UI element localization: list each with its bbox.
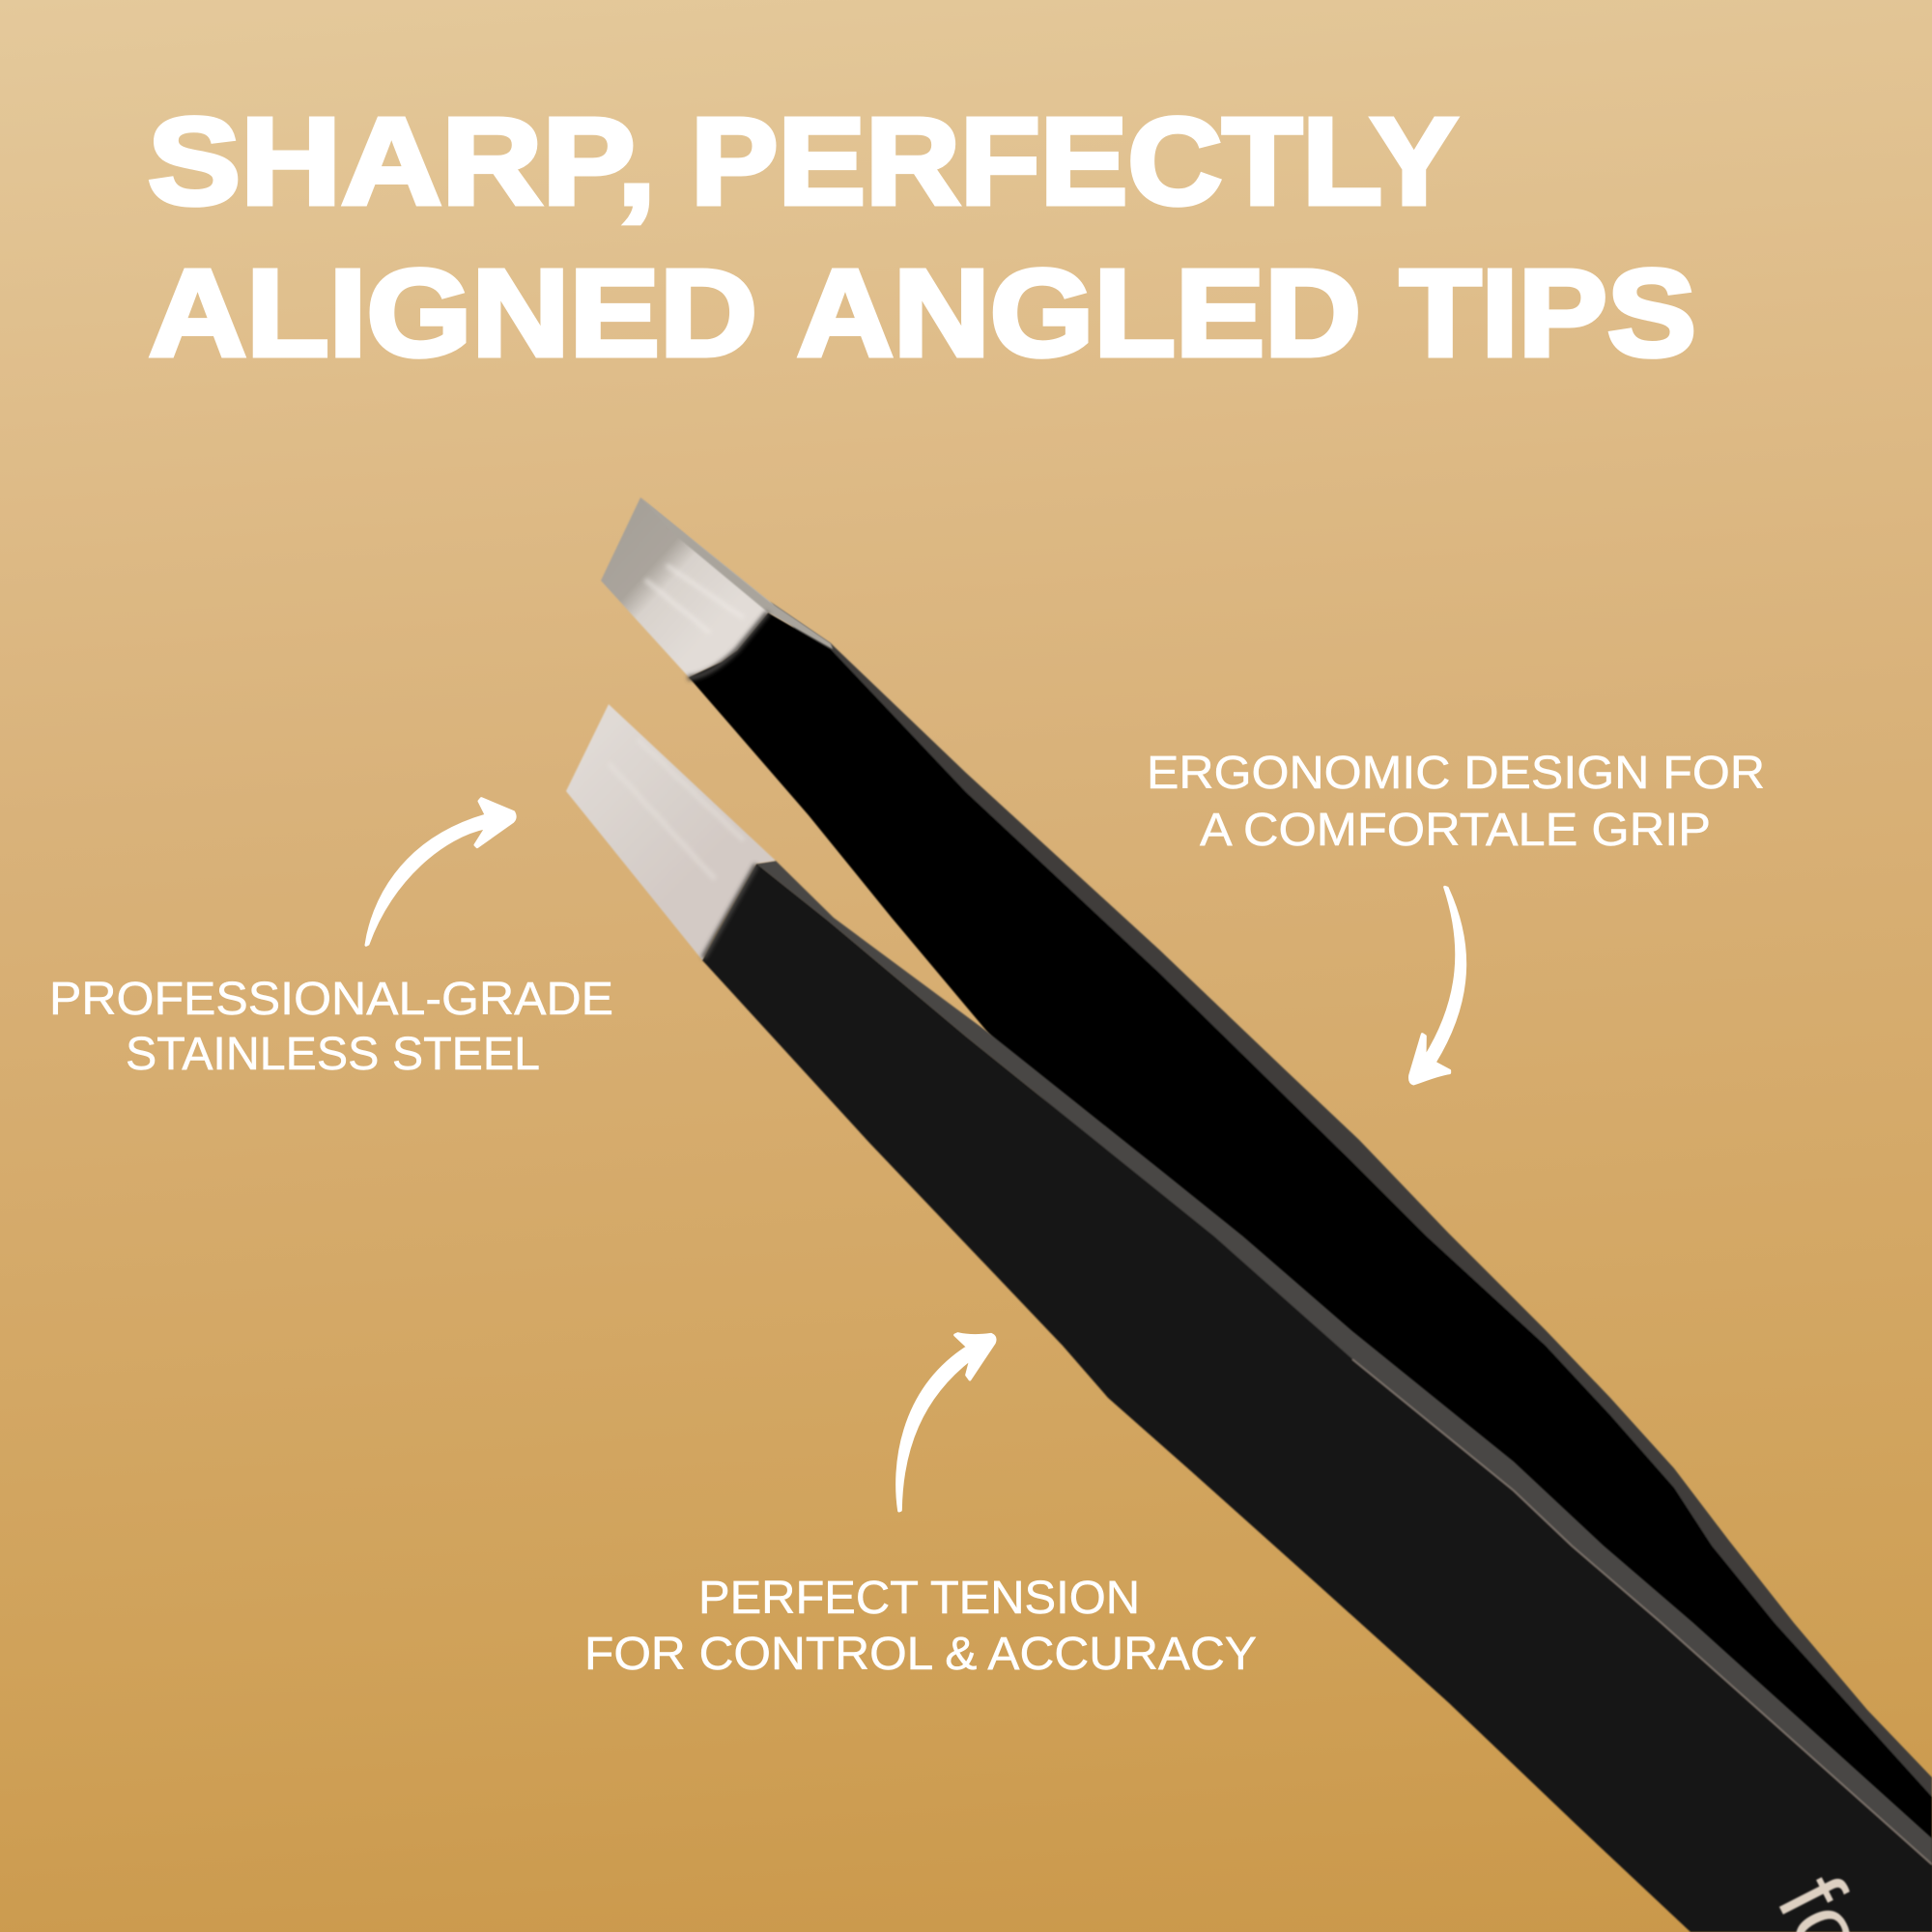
lower tip to coating transition	[703, 865, 756, 958]
callout: professional-grade steel	[49, 974, 613, 1080]
callout: ergonomic design: ERGONOMIC DESIGN FOR	[1147, 748, 1765, 799]
lower arm metal edge band	[756, 861, 1932, 1864]
title: PERFECTLY	[691, 93, 1458, 231]
arrow: tension callout	[897, 1334, 995, 1511]
upper arm metal edge band	[770, 602, 1932, 1816]
lower tweezer arm	[702, 861, 1932, 1932]
title: ANGLED	[797, 244, 1361, 383]
callout: ergonomic design: A COMFORTALE GRIP	[1200, 805, 1711, 856]
callout: ergonomic design	[1147, 748, 1765, 856]
title: ALIGNED	[149, 244, 757, 383]
callout: perfect tension: FOR CONTROL & ACCURACY	[584, 1629, 1257, 1680]
callout: professional-grade steel: STAINLESS STEEL	[126, 1029, 540, 1080]
title	[148, 93, 1696, 383]
callout: professional-grade steel: PROFESSIONAL-GRADE	[49, 974, 613, 1025]
upper steel tip	[601, 497, 833, 678]
upper tip to coating transition	[688, 612, 768, 678]
upper arm black body	[689, 612, 1932, 1932]
arrow: ergonomic callout	[1409, 887, 1465, 1084]
upper tip brushed streaks	[645, 565, 744, 633]
title: SHARP,	[148, 93, 656, 231]
lower arm black body	[702, 864, 1932, 1932]
callout: perfect tension: PERFECT TENSION	[698, 1573, 1140, 1624]
upper tip edge strip	[640, 497, 833, 649]
tweezers illustration	[566, 497, 1932, 1932]
lower tip brushed streaks	[609, 739, 744, 879]
lower arm highlight line	[1352, 1359, 1932, 1864]
upper tweezer arm	[689, 602, 1932, 1932]
callout: perfect tension	[584, 1573, 1257, 1680]
arrow: steel callout	[366, 799, 515, 945]
title: TIPS	[1400, 244, 1696, 383]
lower steel tip	[566, 704, 776, 960]
